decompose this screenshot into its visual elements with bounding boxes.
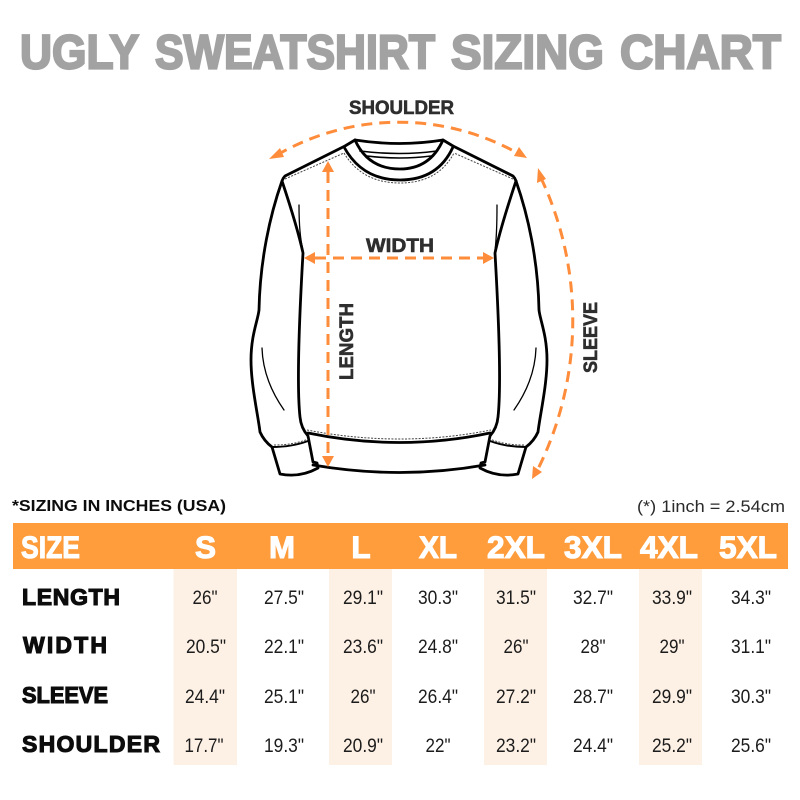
table header: S <box>195 529 216 565</box>
row: shoulder: 19.3" <box>264 735 304 757</box>
arrow: shoulder <box>269 122 527 159</box>
title: SWEATSHIRT <box>155 26 435 80</box>
row: length <box>22 584 771 610</box>
sweatshirt diagram <box>251 98 602 479</box>
row: shoulder: 20.9" <box>343 735 383 757</box>
arrow: length <box>322 161 334 467</box>
row: sleeve: 30.3" <box>731 686 771 708</box>
title: CHART <box>620 26 781 80</box>
row: length: 33.9" <box>652 587 692 609</box>
row: width: 29" <box>660 636 685 658</box>
title: SIZING <box>451 26 604 80</box>
title: UGLY <box>20 26 139 80</box>
table header: 3XL <box>564 529 622 565</box>
row: sleeve <box>22 682 771 708</box>
row: width: 31.1" <box>731 636 771 658</box>
row: shoulder: 23.2" <box>496 735 536 757</box>
row: shoulder: 22" <box>426 735 451 757</box>
title <box>20 26 781 80</box>
row: sleeve: 28.7" <box>573 686 613 708</box>
row: shoulder: 25.2" <box>652 735 692 757</box>
table header: 4XL <box>640 529 698 565</box>
row: shoulder <box>22 731 771 757</box>
row: length: 26" <box>192 587 218 609</box>
row: sleeve: 26.4" <box>418 686 458 708</box>
row: shoulder: 25.6" <box>731 735 771 757</box>
row: sleeve: 27.2" <box>496 686 536 708</box>
row: length: LENGTH <box>22 584 120 610</box>
row: shoulder: 24.4" <box>573 735 613 757</box>
row: width: 24.8" <box>418 636 458 658</box>
row: sleeve: 24.4" <box>185 686 225 708</box>
label: width: WIDTH <box>366 236 434 257</box>
sweatshirt outline <box>251 140 547 475</box>
table header: 2XL <box>487 529 545 565</box>
row: sleeve: 26" <box>350 686 376 708</box>
size table <box>13 523 788 765</box>
row: length: 30.3" <box>418 587 458 609</box>
row: width: WIDTH <box>23 632 107 658</box>
row: width: 23.6" <box>343 636 383 658</box>
row: width: 26" <box>504 636 529 658</box>
row: width: 22.1" <box>264 636 304 658</box>
arrow: width <box>304 252 494 264</box>
row: width <box>23 632 771 658</box>
shaded columns <box>174 569 702 765</box>
row: length: 34.3" <box>731 587 771 609</box>
row: sleeve: SLEEVE <box>22 682 108 708</box>
arrow: sleeve <box>532 168 573 479</box>
row: sleeve: 29.9" <box>652 686 692 708</box>
row: length: 31.5" <box>496 587 536 609</box>
row: shoulder: 17.7" <box>184 735 224 757</box>
row: width: 20.5" <box>186 636 226 658</box>
row: length: 29.1" <box>343 587 383 609</box>
label: length: LENGTH <box>337 303 358 380</box>
label: sleeve: SLEEVE <box>581 302 602 373</box>
row: width: 28" <box>580 636 606 658</box>
table header: L <box>351 529 371 565</box>
table header: XL <box>419 529 457 565</box>
table header <box>13 523 788 569</box>
label: shoulder: SHOULDER <box>349 98 454 119</box>
row: sleeve: 25.1" <box>264 686 304 708</box>
table header: SIZE <box>21 529 80 565</box>
table header: 5XL <box>719 529 777 565</box>
row: shoulder: SHOULDER <box>22 731 160 757</box>
note: inch conversion: (*) 1inch = 2.54cm <box>637 498 785 516</box>
row: length: 32.7" <box>573 587 613 609</box>
row: length: 27.5" <box>264 587 304 609</box>
note: sizing in inches: *SIZING IN INCHES (USA) <box>12 498 226 515</box>
table header: M <box>269 529 295 565</box>
